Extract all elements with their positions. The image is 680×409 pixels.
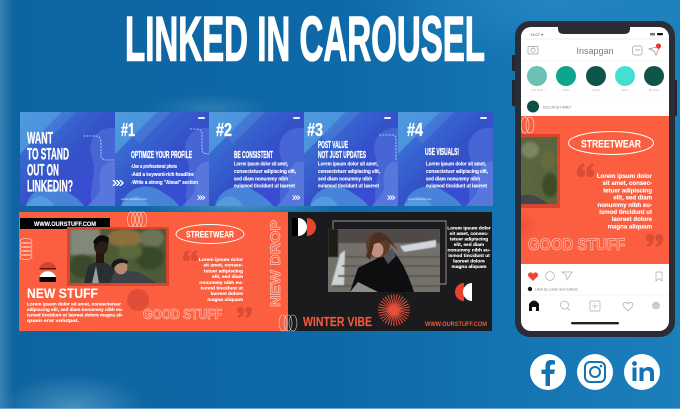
quote close bbox=[646, 234, 663, 247]
status bar: 13:07 ▾ bbox=[530, 32, 543, 37]
panel: tip 4: USE VISUALS! bbox=[425, 146, 459, 158]
body text right: ismod tincidunt ut bbox=[201, 286, 243, 292]
rings bbox=[521, 117, 534, 133]
panel: tip 2: #2 bbox=[216, 120, 232, 140]
panel: tip 1: OPTIMIZE YOUR PROFILE bbox=[131, 149, 192, 161]
social icons bbox=[530, 354, 660, 390]
body text: magna aliquam bbox=[608, 223, 653, 230]
body text right: laoreet dolore bbox=[211, 291, 243, 297]
icon: app box bbox=[632, 46, 642, 55]
icon: instagram bbox=[577, 354, 613, 390]
body text right: magna aliquam bbox=[207, 297, 244, 303]
post image orange bbox=[507, 116, 669, 264]
paragraph: quam erat volutpat. bbox=[27, 318, 79, 323]
body text right: elit, sed diam bbox=[212, 274, 244, 280]
good stuff outline: GOOD STUFF bbox=[143, 307, 222, 323]
panel: tip 2 bbox=[209, 112, 304, 206]
panel: tip 1: www.website.com bbox=[121, 197, 147, 201]
panel: tip 3: NOT JUST UPDATES bbox=[318, 149, 366, 161]
icon: camera bbox=[528, 46, 538, 54]
heading winter vibe: WINTER VIBE bbox=[303, 314, 372, 329]
streetwear badge: STREETWEAR bbox=[581, 138, 641, 150]
status bar bbox=[521, 27, 669, 39]
body text: sit amet, consec- bbox=[450, 231, 489, 237]
sunburst bbox=[378, 294, 410, 326]
carousel strip bbox=[20, 112, 493, 206]
post actions: Liked by Lorem and 3 others bbox=[535, 288, 578, 292]
photo: woman on stairs bbox=[328, 221, 446, 292]
good stuff outline: GOOD STUFF bbox=[528, 235, 625, 254]
streetwear badge: STREETWEAR bbox=[186, 230, 234, 240]
panel: tip 4: sed diam nonummy nibh bbox=[426, 176, 480, 182]
photo crop bbox=[521, 134, 560, 208]
panel: tip 3: sed diam nonummy nibh bbox=[318, 176, 372, 182]
panel: tip 2: consectetuer adipiscing elit, bbox=[234, 169, 296, 175]
panel: tip 3 bbox=[304, 112, 399, 206]
body text: ismod tincidunt ut bbox=[448, 253, 490, 259]
panel: want to stand out: WANT bbox=[27, 130, 53, 148]
icon: facebook bbox=[530, 354, 566, 390]
stories row bbox=[527, 66, 664, 92]
post actions bbox=[528, 272, 662, 292]
panel: want to stand out bbox=[20, 112, 115, 206]
panel: tip 3: POST VALUE bbox=[318, 139, 348, 151]
panel: tip 1: -Use a professional photo bbox=[131, 164, 177, 170]
body text: nonummy nibh eu- bbox=[597, 202, 652, 209]
sunburst crop bbox=[521, 212, 535, 240]
panel: want to stand out: TO STAND bbox=[27, 146, 69, 164]
icon: linkedin bbox=[624, 354, 660, 390]
home indicator bbox=[571, 322, 619, 324]
panel: tip 4: www.website.com bbox=[408, 197, 432, 201]
panel: tip 1 bbox=[115, 112, 210, 206]
panel: tip 4: consectetuer adipiscing elit, bbox=[426, 169, 488, 175]
body text bbox=[597, 173, 653, 230]
quote mark open bbox=[183, 250, 198, 261]
panel: tip 1: -Write a strong "About" section bbox=[131, 180, 198, 186]
body text right: nonummy nibh eu- bbox=[199, 280, 243, 286]
panel: tip 3: #3 bbox=[307, 120, 323, 140]
heading new stuff: NEW STUFF bbox=[27, 286, 98, 301]
stories row: Dolor bbox=[622, 88, 628, 92]
body text right: tetuer adipiscing bbox=[204, 268, 243, 274]
panel: tip 1: -Add a keyword-rich headline bbox=[131, 172, 195, 178]
panel: black winter vibe banner bbox=[279, 212, 492, 331]
new drop vertical: NEW DROP bbox=[267, 220, 283, 307]
rings bottom left bbox=[279, 315, 297, 331]
body text: laoreet dolore bbox=[453, 258, 485, 264]
body text: sit amet, consec- bbox=[603, 180, 652, 187]
panel: tip 2: Lorem ipsum dolor sit amet, bbox=[234, 162, 288, 168]
panel: tip 2: sed diam nonummy nibh bbox=[234, 176, 288, 182]
panel: orange new stuff banner bbox=[19, 212, 288, 331]
website url: WWW.OURSTUFF.COM bbox=[425, 321, 487, 328]
rings left bbox=[20, 238, 32, 260]
body text bbox=[447, 226, 491, 270]
quote mark close bbox=[237, 307, 252, 318]
streetwear badge bbox=[568, 132, 654, 154]
stories row: Ipsum bbox=[592, 88, 600, 92]
app title: Insapgan bbox=[576, 46, 614, 56]
body text: elit, sed diam bbox=[613, 195, 653, 202]
quote open bbox=[577, 163, 594, 177]
icon: half circles right bbox=[455, 283, 472, 301]
photo: two men bbox=[67, 227, 169, 286]
body text: Lorem ipsum dolor bbox=[447, 226, 491, 232]
body text right: sit amet, consec- bbox=[203, 263, 243, 269]
paragraph: adipiscing elit, sed diam nonummy nibh eu- bbox=[27, 307, 123, 312]
stories row: Your Story bbox=[531, 88, 544, 92]
stories row: Lorem bbox=[562, 88, 570, 92]
url bar bbox=[20, 218, 110, 229]
body text: laoreet dolore bbox=[612, 216, 653, 223]
panel: want to stand out: LINKEDIN? bbox=[27, 178, 73, 196]
post avatar and name bbox=[527, 100, 571, 112]
body text: ismod tincidunt ut bbox=[599, 209, 652, 216]
icon: send with badge bbox=[649, 43, 661, 55]
phone mockup bbox=[507, 21, 677, 337]
paragraph bbox=[27, 302, 123, 323]
body text: magna aliquam bbox=[452, 264, 486, 270]
body text: Lorem ipsum dolor bbox=[597, 173, 653, 180]
stories row: Sit_Amet bbox=[649, 88, 660, 92]
body text: tetuer adipiscing bbox=[603, 187, 652, 194]
arrow: next slide bbox=[112, 180, 124, 186]
rings bbox=[128, 212, 146, 227]
body text: elit, sed diam bbox=[454, 242, 484, 248]
paragraph: ismod tincidunt ut laoreet dolore magna ali- bbox=[27, 312, 123, 318]
body text: tetuer adipiscing bbox=[450, 236, 488, 242]
panel: tip 2: euismod tincidunt ut laoreet bbox=[234, 184, 295, 190]
panel: want to stand out: OUT ON bbox=[27, 162, 59, 180]
post avatar and name: DOLOR SIT AMET bbox=[543, 106, 571, 110]
url bar: WWW.OURSTUFF.COM bbox=[34, 221, 96, 228]
body text: nonummy nibh eu- bbox=[448, 248, 491, 254]
panel: tip 4: #4 bbox=[407, 120, 423, 140]
body text right: Lorem ipsum dolor bbox=[199, 257, 243, 263]
icon: half circles bbox=[292, 218, 316, 236]
panel: tip 3: euismod tincidunt ut laoreet bbox=[318, 184, 379, 190]
tab bar bbox=[529, 300, 660, 311]
decorative circle bbox=[127, 289, 149, 311]
panel: tip 2: BE CONSISTENT bbox=[234, 149, 273, 161]
panel: tip 4: euismod tincidunt ut laoreet bbox=[426, 184, 487, 190]
paragraph: Lorem ipsum dolor sit amet, consectetuer bbox=[27, 302, 121, 306]
panel: tip 4: Lorem ipsum dolor sit amet, bbox=[426, 162, 486, 168]
panel: tip 4 bbox=[398, 112, 493, 206]
body text right bbox=[199, 257, 244, 303]
icon: stacked domes bbox=[40, 262, 56, 282]
panel: tip 3: consectetuer adipiscing elit, bbox=[318, 169, 380, 175]
panel: tip 3: Lorem ipsum dolor sit amet, bbox=[318, 162, 378, 168]
streetwear badge bbox=[176, 224, 244, 244]
panel: tip 1: #1 bbox=[121, 120, 135, 140]
